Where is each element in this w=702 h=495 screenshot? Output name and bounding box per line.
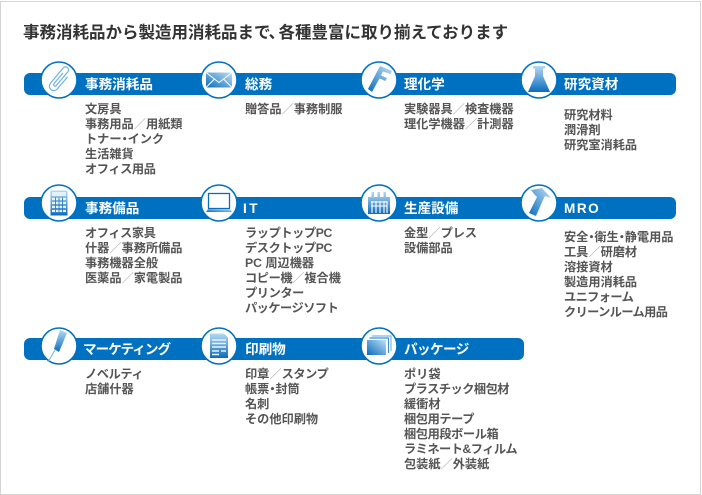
item list: オフィス家具: [85, 226, 155, 240]
item list: 什器／事務所備品: [85, 241, 182, 255]
title: 、: [268, 24, 285, 42]
panel: 総務: [202, 61, 342, 116]
item list: [564, 108, 637, 152]
item list: 医薬品／家電製品: [85, 271, 182, 285]
item list: ・: [585, 230, 598, 244]
item list: プラスチック梱包材: [404, 382, 509, 396]
icon: flask: [522, 61, 556, 99]
icon: document: [202, 327, 236, 365]
item list: [404, 102, 514, 131]
item list: その他印刷物: [245, 412, 318, 426]
item list: [85, 226, 182, 285]
item list: [245, 367, 328, 426]
icon: stacked boxes: [362, 327, 396, 365]
heading: MRO: [564, 201, 600, 216]
panel: 事務消耗品: [42, 61, 182, 176]
item list: 研究材料: [564, 108, 613, 122]
item list: 設備部品: [404, 241, 453, 255]
item list: 理化学機器／計測器: [404, 117, 514, 131]
item list: デスクトップPC: [245, 241, 332, 255]
panel: IT: [201, 184, 341, 315]
heading: 総務: [245, 77, 272, 92]
panel: マーケティング: [42, 327, 171, 396]
band: row 2: [24, 197, 676, 219]
heading: パッケージ: [404, 342, 469, 357]
icon: flag pen: [42, 327, 76, 365]
item list: コピー機／複合機: [245, 271, 341, 285]
item list: クリーンルーム用品: [564, 305, 667, 319]
item list: [85, 367, 143, 396]
icon: factory: [361, 184, 397, 222]
panel: 生産設備: [361, 184, 477, 255]
item list: [564, 230, 674, 319]
item list: 事務機器全般: [85, 256, 158, 270]
item list: 名刺: [245, 397, 269, 411]
panel: 印刷物: [202, 327, 328, 426]
heading: 理化学: [404, 77, 445, 92]
item list: 緩衝材: [404, 397, 441, 411]
item list: 金型／プレス: [404, 226, 477, 240]
item list: 店舗什器: [85, 382, 134, 396]
item list: ラップトップPC: [245, 226, 332, 240]
item list: 事務用品／用紙類: [85, 117, 182, 131]
item list: 潤滑剤: [564, 123, 601, 137]
item list: 帳票 封筒: [245, 382, 300, 396]
item list: ・: [266, 382, 279, 396]
item list: トナー インク: [85, 132, 164, 146]
icon: envelope: [202, 61, 236, 99]
item list: 梱包用テープ: [404, 412, 474, 426]
item list: [85, 102, 182, 176]
band: row 3: [24, 338, 524, 360]
item list: 溶接資材: [564, 260, 613, 274]
item list: プリンター: [245, 286, 304, 300]
heading: 印刷物: [245, 342, 286, 357]
heading: 生産設備: [404, 201, 458, 216]
item list: [404, 226, 477, 255]
icon: caliper: [362, 61, 396, 99]
item list: [404, 367, 517, 471]
item list: パッケージソフト: [245, 301, 338, 315]
item list: 生活雑貨: [85, 147, 134, 161]
item list: 製造用消耗品: [564, 275, 637, 289]
item list: ・: [616, 230, 628, 244]
heading: 事務消耗品: [85, 77, 153, 92]
item list: 実験器具／検査機器: [404, 102, 514, 116]
item list: [245, 226, 341, 315]
item list: 贈答品／事務制服: [245, 102, 342, 116]
band: row 1: [24, 73, 676, 95]
heading: マーケティング: [83, 342, 170, 357]
item list: ラミネート&フィルム: [404, 442, 517, 456]
item list: PC 周辺機器: [245, 256, 314, 270]
item list: 文房具: [85, 102, 122, 116]
panel: 研究資材: [522, 61, 637, 152]
heading: IT: [243, 201, 260, 216]
icon: laptop: [201, 184, 237, 222]
heading: 研究資材: [564, 77, 618, 92]
item list: 印章／スタンプ: [245, 367, 328, 381]
item list: 工具／研磨材: [564, 245, 637, 259]
item list: ユニフォーム: [564, 290, 633, 304]
panel: MRO: [521, 184, 674, 319]
icon: hammer: [521, 184, 557, 222]
item list: ポリ袋: [404, 367, 441, 381]
icon: paper clip: [42, 61, 76, 99]
item list: 包装紙／外装紙: [404, 457, 489, 471]
heading: 事務備品: [85, 201, 139, 216]
panel: 理化学: [362, 61, 514, 131]
title: 事務消耗品から製造用消耗品まで 各種豊富に取り揃えております: [23, 24, 508, 42]
item list: 梱包用段ボール箱: [404, 427, 498, 441]
panel: 事務備品: [41, 184, 182, 285]
icon: calculator: [41, 184, 77, 222]
panel: パッケージ: [362, 327, 517, 471]
item list: ・: [119, 132, 131, 146]
item list: オフィス用品: [85, 162, 155, 176]
item list: 安全 衛生 静電用品: [564, 230, 674, 244]
item list: ノベルティ: [85, 367, 143, 381]
item list: 研究室消耗品: [564, 138, 637, 152]
